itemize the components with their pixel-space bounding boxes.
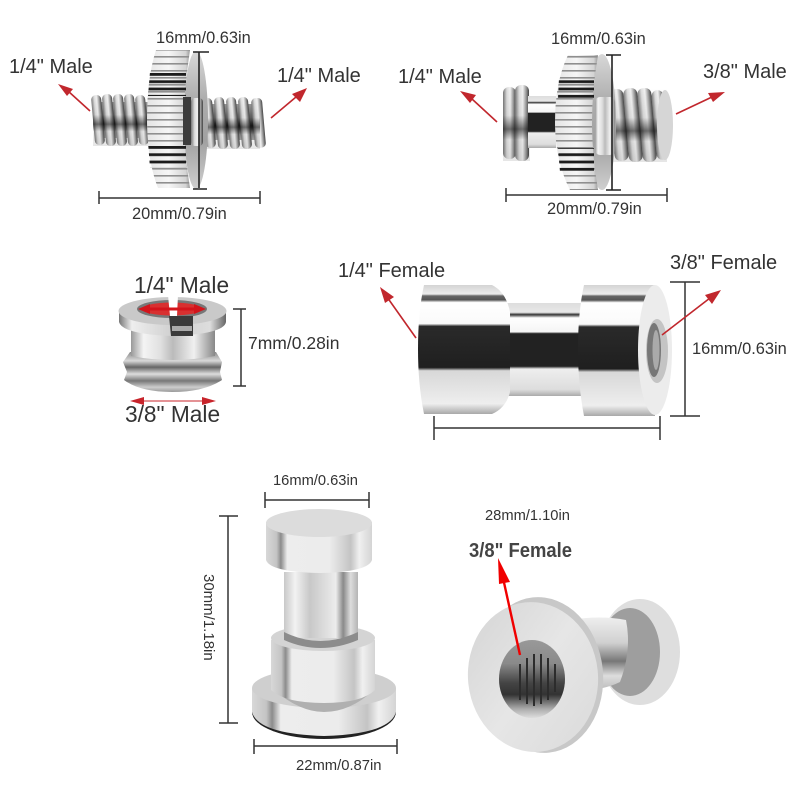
dimension line: length	[434, 416, 660, 440]
panel: flanged spigot	[461, 508, 680, 759]
panel: stepped spigot	[200, 473, 397, 774]
label: 22mm: 22mm/0.87in	[296, 758, 382, 774]
arrow: left	[460, 91, 497, 122]
dimension line: 20mm length	[99, 191, 260, 204]
label: 16mm: 16mm/0.63in	[692, 340, 787, 358]
dimension line: 16mm height	[606, 55, 621, 190]
icon: flanged spigot	[461, 591, 680, 759]
dimension line: 16mm	[265, 492, 369, 508]
arrow: right	[676, 92, 725, 114]
dimension line: 16mm height	[193, 52, 209, 189]
panel: double male screw 1/4 to 3/8	[398, 30, 787, 218]
dimension line: 7mm	[233, 309, 246, 386]
arrow: 3/8 female	[498, 558, 520, 655]
label: 1/4 female: 1/4" Female	[338, 260, 445, 282]
arrow: left	[58, 84, 90, 111]
panel: double male screw 1/4 to 1/4	[9, 29, 361, 223]
label: 3/8 female: 3/8" Female	[469, 540, 572, 562]
label: left 1/4 male: 1/4" Male	[398, 66, 482, 88]
panel: double female spigot	[338, 252, 787, 440]
arrow: bottom double arrow	[130, 397, 216, 405]
label: right 3/8 male: 3/8" Male	[703, 61, 787, 83]
dimension line: height	[670, 282, 700, 416]
icon: 1/4 to 3/8 screw	[503, 54, 673, 190]
arrow: 3/8 female	[662, 290, 721, 335]
label: 28mm: 28mm/1.10in	[485, 508, 570, 524]
icon: slotted bushing	[118, 295, 226, 392]
arrow: inner double arrow	[138, 304, 206, 314]
dimension line: 20mm length	[506, 188, 667, 202]
label: right 1/4 male: 1/4" Male	[277, 65, 361, 87]
panel: slotted bushing	[118, 272, 339, 427]
label: 16mm: 16mm/0.63in	[273, 473, 358, 489]
label: 1/4 male: 1/4" Male	[134, 272, 229, 298]
dimension line: 30mm	[219, 516, 238, 723]
arrow: 1/4 female	[380, 287, 416, 338]
label: 3/8 female: 3/8" Female	[670, 252, 777, 274]
label: 30mm: 30mm/1.18in	[200, 574, 217, 661]
label: 20mm: 20mm/0.79in	[547, 200, 642, 218]
icon: double female spigot	[418, 285, 672, 416]
dimension line: 22mm	[254, 739, 397, 754]
label: 20mm: 20mm/0.79in	[132, 205, 227, 223]
label: left 1/4 male: 1/4" Male	[9, 56, 93, 78]
icon: stepped spigot	[252, 509, 396, 739]
label: 16mm: 16mm/0.63in	[551, 30, 646, 48]
icon: 1/4 to 1/4 screw	[91, 50, 266, 189]
label: 16mm: 16mm/0.63in	[156, 29, 251, 47]
arrow: right	[271, 88, 307, 118]
label: 7mm: 7mm/0.28in	[248, 333, 339, 353]
label: 3/8 male: 3/8" Male	[125, 401, 220, 427]
